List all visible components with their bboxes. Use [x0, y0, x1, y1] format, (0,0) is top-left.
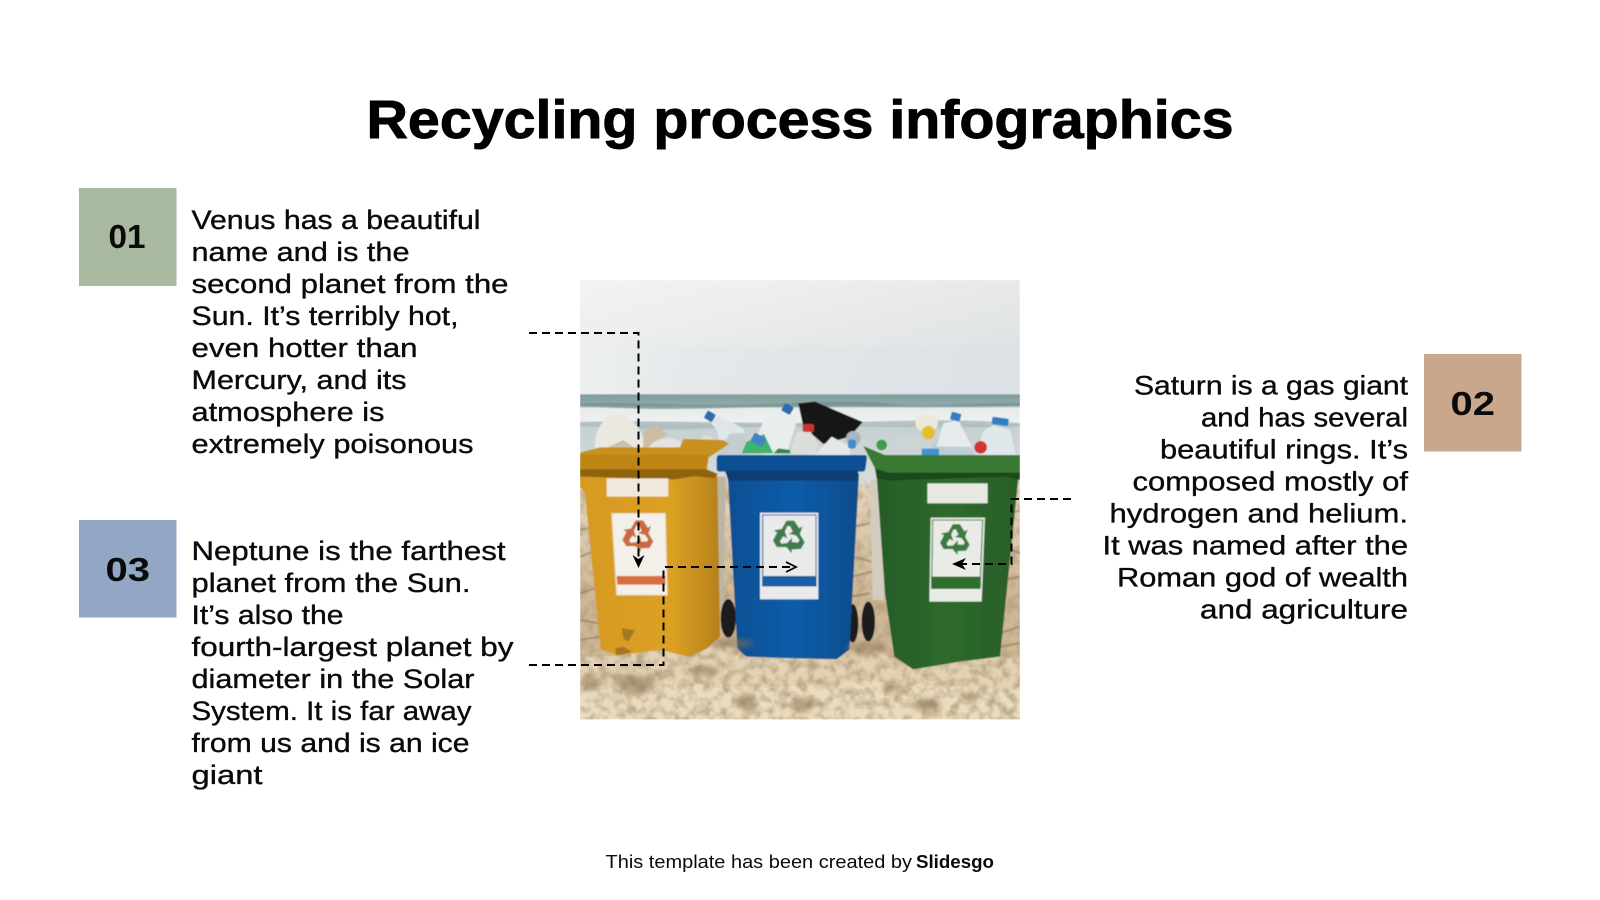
step 01 text: Venus has a beautiful — [192, 205, 480, 235]
step 03 text: giant — [192, 760, 263, 790]
infographic slide — [79, 98, 1522, 872]
connector: 01 to yellow bin — [529, 333, 638, 562]
step 03 text: planet from the Sun. — [192, 568, 470, 598]
step 02 text: It was named after the — [1102, 530, 1408, 560]
blue bin contents — [704, 402, 863, 455]
step 03 badge — [79, 520, 176, 618]
arrowhead: green bin — [952, 558, 966, 570]
step 03 text: diameter in the Solar — [192, 664, 475, 694]
step 02 text: Saturn is a gas giant — [1134, 370, 1409, 400]
title: Recycling process infographics — [366, 91, 1234, 150]
arrowhead: yellow bin — [632, 555, 644, 568]
step 02 text: beautiful rings. It’s — [1160, 434, 1408, 464]
step 03 text: It’s also the — [192, 600, 344, 630]
step 01 text — [192, 205, 508, 459]
step 02 text: Roman god of wealth — [1117, 562, 1408, 592]
step 02 text: composed mostly of — [1132, 466, 1409, 496]
step 01 text: atmosphere is — [192, 397, 384, 427]
green bin — [863, 446, 1020, 669]
connector: 03 to blue bin — [529, 567, 792, 665]
step 01 text: Sun. It’s terribly hot, — [192, 301, 458, 331]
footer credit: This template has been created by — [606, 851, 913, 872]
step 01 text: Mercury, and its — [192, 365, 406, 395]
step 01 badge: 01 — [108, 218, 146, 255]
step 03 text — [192, 536, 514, 790]
step 01 badge — [79, 188, 176, 286]
footer credit: Slidesgo — [916, 851, 994, 872]
step 02 text — [1102, 370, 1409, 624]
step 01 text: extremely poisonous — [192, 429, 474, 459]
step 02 text: and has several — [1201, 402, 1408, 432]
step 02 text: and agriculture — [1200, 594, 1408, 624]
green bin contents — [876, 412, 1016, 455]
connector: 02 to green bin — [958, 499, 1071, 564]
sand shading — [581, 639, 979, 713]
wheels — [721, 599, 875, 643]
step 02 badge: 02 — [1450, 385, 1495, 422]
step 03 text: Neptune is the farthest — [192, 536, 506, 566]
yellow bin contents — [594, 414, 714, 449]
front sand — [580, 642, 1020, 720]
step 03 text: System. It is far away — [192, 696, 472, 726]
step 02 text: hydrogen and helium. — [1110, 498, 1408, 528]
step 02 badge — [1424, 354, 1522, 452]
step 01 text: name and is the — [192, 237, 410, 267]
step 03 text: from us and is an ice — [192, 728, 470, 758]
step 03 badge: 03 — [106, 551, 150, 588]
step 03 text: fourth-largest planet by — [192, 632, 514, 662]
photo: three recycling bins on a beach — [580, 280, 1020, 720]
arrowhead: blue bin — [786, 562, 796, 572]
step 01 text: second planet from the — [192, 269, 508, 299]
blue bin — [717, 455, 867, 659]
yellow bin — [580, 439, 729, 657]
step 01 text: even hotter than — [192, 333, 418, 363]
beach ripples — [580, 511, 1020, 647]
